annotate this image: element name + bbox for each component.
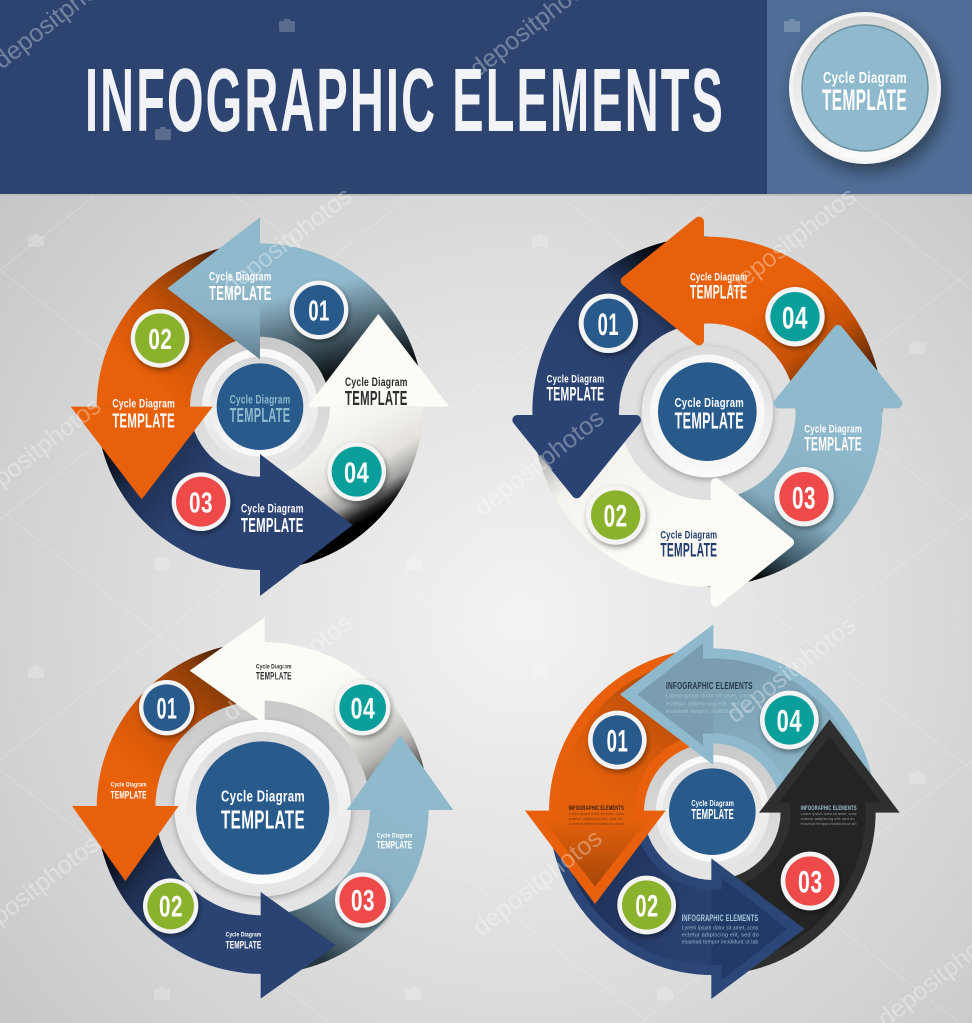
badge 01 <box>290 281 348 339</box>
label arrow 2 <box>660 529 717 562</box>
centre label: TEMPLATE <box>230 404 290 427</box>
arrow 2 tail <box>532 412 707 587</box>
text block arrow 3: eiusmod tempor incididunt ut lab <box>801 822 857 826</box>
text block arrow 2: INFOGRAPHIC ELEMENTS <box>682 913 758 923</box>
header badge <box>789 12 941 164</box>
centre label: Cycle Diagram <box>675 395 744 410</box>
header badge: Cycle Diagram <box>823 70 907 87</box>
arrow 1 head <box>517 411 636 493</box>
arrow 3 head <box>759 719 900 813</box>
label arrow 3 <box>241 502 304 537</box>
diagram 1: cycle top left <box>71 217 449 596</box>
text block arrow 1: ectetur adipiscing elit, sed do <box>569 817 622 821</box>
arrow 4 head <box>307 314 449 407</box>
centre label: Cycle Diagram <box>230 392 290 406</box>
watermarks: depositphotos <box>469 404 609 522</box>
centre rings <box>643 743 781 881</box>
badge 04: 04 <box>777 704 802 739</box>
badge 03: 03 <box>798 865 823 900</box>
label arrow 1: Cycle Diagram <box>111 782 147 789</box>
badge 02: 02 <box>148 324 172 356</box>
badge 02 <box>143 878 198 934</box>
arrow 1 tail <box>97 642 263 808</box>
label arrow 3: Cycle Diagram <box>241 502 304 516</box>
text block arrow 1: INFOGRAPHIC ELEMENTS <box>569 805 624 812</box>
arrow 1 head <box>167 217 260 359</box>
centre rings <box>189 336 331 477</box>
label arrow 2: Cycle Diagram <box>660 529 717 541</box>
label arrow 3: TEMPLATE <box>377 840 412 852</box>
badge 01: 01 <box>157 692 177 725</box>
arrow 2 tail <box>549 812 712 975</box>
label arrow 1 <box>547 373 604 406</box>
arrow 1 tail <box>549 648 712 812</box>
label arrow 4 <box>256 663 292 682</box>
arrow 2 tail <box>97 243 260 407</box>
centre label <box>675 395 744 434</box>
text block arrow 3: INFOGRAPHIC ELEMENTS <box>801 805 857 812</box>
text block arrow 4: ectetur adipiscing elit, sed do <box>666 701 749 707</box>
centre label <box>691 798 734 823</box>
arrow 2 head <box>711 858 805 999</box>
arrow 3 head <box>779 330 897 412</box>
text block arrow 4: eiusmod tempor incididunt ut lab <box>666 709 752 715</box>
centre label: Cycle Diagram <box>221 789 305 806</box>
arrow 3 head <box>347 735 453 810</box>
centre label: TEMPLATE <box>675 408 744 434</box>
centre label <box>221 789 305 834</box>
badge 03: 03 <box>792 480 816 515</box>
arrow 3 tail <box>712 812 876 975</box>
centre disc <box>658 362 757 461</box>
arrow 2 head <box>707 483 789 602</box>
arrow 2 head <box>261 892 336 999</box>
arrow 3 tail <box>707 412 882 587</box>
watermarks: depositphotos <box>217 182 357 300</box>
arrow 2 head <box>71 407 213 499</box>
label arrow 2 <box>226 932 261 951</box>
text block arrow 3 <box>801 805 857 826</box>
arrow 4 tail <box>260 407 423 570</box>
label arrow 2: Cycle Diagram <box>226 932 261 939</box>
badge 02: 02 <box>604 499 628 534</box>
text block arrow 4: INFOGRAPHIC ELEMENTS <box>666 681 753 692</box>
badge 03: 03 <box>351 885 375 918</box>
arrow 3 tail <box>263 808 429 974</box>
badge 02 <box>131 309 189 368</box>
centre rings <box>607 312 807 512</box>
badge 02: 02 <box>635 889 659 924</box>
label arrow 2: TEMPLATE <box>226 939 261 951</box>
label arrow 4 <box>690 272 747 304</box>
badge 02 <box>586 485 645 545</box>
badge 01 <box>588 711 647 769</box>
centre disc <box>669 768 756 855</box>
label arrow 1: TEMPLATE <box>111 789 147 801</box>
arrow 2 tail <box>97 808 263 974</box>
badge 04 <box>327 442 386 501</box>
label arrow 3: Cycle Diagram <box>804 424 862 436</box>
label arrow 1: TEMPLATE <box>547 385 604 406</box>
arrow 1 head <box>72 806 179 881</box>
watermarks: depositphotos <box>721 182 861 300</box>
arrow 3 head <box>260 454 353 596</box>
arrow 4 tail <box>263 642 429 808</box>
badge 03 <box>781 852 839 910</box>
centre label: Cycle Diagram <box>691 798 734 808</box>
arrow 1 tail <box>532 237 707 412</box>
label arrow 4: TEMPLATE <box>256 670 292 682</box>
label arrow 2 <box>112 396 175 432</box>
label arrow 1: TEMPLATE <box>209 282 272 305</box>
text block arrow 1 <box>569 805 624 826</box>
text block arrow 2 <box>682 913 759 946</box>
arrow 4 head <box>190 617 265 724</box>
diagram 3: cycle bottom left <box>72 617 453 999</box>
badge 01: 01 <box>308 296 330 328</box>
text block arrow 1: eiusmod tempor incididunt ut lab <box>569 822 624 826</box>
label arrow 4: TEMPLATE <box>345 387 408 410</box>
badge 01 <box>579 294 638 353</box>
label arrow 3 <box>804 424 862 456</box>
text block arrow 2: Lorem ipsum dolor sit amet, cons <box>682 926 759 932</box>
label arrow 2: TEMPLATE <box>112 409 175 432</box>
arrow 1 head <box>525 811 666 904</box>
centre label: TEMPLATE <box>221 804 305 834</box>
label arrow 4 <box>345 375 408 410</box>
centre rings <box>154 700 371 916</box>
centre disc <box>217 363 303 450</box>
label arrow 1 <box>209 270 272 305</box>
badge 03 <box>335 872 390 928</box>
badge 04 <box>760 691 819 749</box>
label arrow 4: Cycle Diagram <box>256 663 292 670</box>
badge 04: 04 <box>344 457 369 489</box>
diagram 4: cycle bottom right <box>525 624 900 999</box>
label arrow 2: TEMPLATE <box>660 541 717 562</box>
arrow 4 head <box>620 624 713 765</box>
text block arrow 3: ectetur adipiscing elit, sed do <box>801 817 855 821</box>
watermarks: depositphotos <box>467 824 607 942</box>
label arrow 3 <box>377 832 412 852</box>
badge 03 <box>774 467 834 526</box>
badge 02 <box>617 876 676 934</box>
centre disc <box>196 741 329 875</box>
arrow 4 tail <box>712 648 876 812</box>
label arrow 4: Cycle Diagram <box>345 375 408 389</box>
arrow 4 tail <box>707 237 882 412</box>
badge 04: 04 <box>351 692 375 725</box>
text block arrow 2: eiusmod tempor incididunt ut lab <box>682 940 758 946</box>
label arrow 1: Cycle Diagram <box>547 373 604 385</box>
badge 04 <box>335 680 390 735</box>
badge 01: 01 <box>607 724 628 759</box>
watermarks: depositphotos <box>217 609 357 727</box>
watermarks: depositphotos <box>721 611 861 729</box>
badge 01: 01 <box>598 307 619 342</box>
arrow 3 tail <box>97 407 260 570</box>
label arrow 1: Cycle Diagram <box>209 270 272 284</box>
label arrow 3: TEMPLATE <box>804 435 862 456</box>
label arrow 1 <box>111 782 147 801</box>
badge 04: 04 <box>782 300 808 335</box>
text block arrow 2: ectetur adipiscing elit, sed do <box>682 933 759 939</box>
badge 03 <box>172 472 230 531</box>
label arrow 3: TEMPLATE <box>241 514 304 537</box>
diagram 2: cycle top right <box>517 222 897 602</box>
header banner <box>0 0 972 196</box>
arrow 1 tail <box>260 243 423 407</box>
label arrow 2: Cycle Diagram <box>112 396 175 410</box>
badge 02: 02 <box>159 891 183 924</box>
label arrow 4: TEMPLATE <box>690 283 747 304</box>
label arrow 4: Cycle Diagram <box>690 272 747 284</box>
badge 01 <box>139 680 194 735</box>
text block arrow 4 <box>666 681 753 715</box>
badge 04 <box>765 287 825 346</box>
text block arrow 3: Lorem ipsum dolor sit amet, cons <box>801 812 857 816</box>
text block arrow 4: Lorem ipsum dolor sit amet, cons <box>666 694 752 700</box>
text block arrow 1: Lorem ipsum dolor sit amet, cons <box>569 812 624 816</box>
label arrow 3: Cycle Diagram <box>377 832 412 839</box>
arrow 4 head <box>626 222 708 340</box>
badge 03: 03 <box>189 487 213 519</box>
centre label: TEMPLATE <box>691 807 734 823</box>
centre label <box>230 392 290 427</box>
